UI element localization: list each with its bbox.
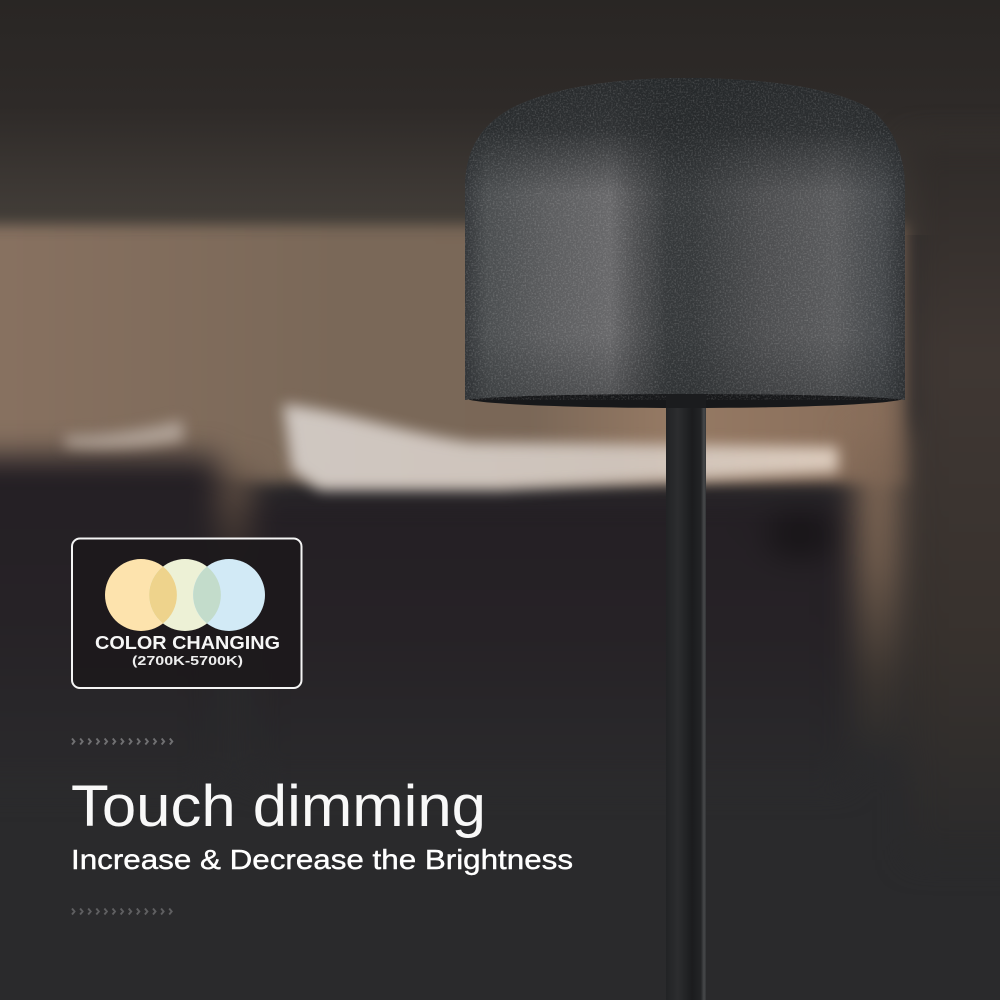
top chevron divider: [72, 738, 172, 744]
badge: color changing: [72, 538, 302, 688]
subheading: Increase & Decrease the Brightness: [71, 844, 573, 875]
lamp: [465, 78, 905, 1000]
lamp shade: [465, 78, 905, 408]
badge label: COLOR CHANGING: [95, 633, 280, 653]
dark furniture masses: [0, 140, 1000, 860]
pillows: [65, 404, 838, 490]
icon: overlapping colour circles: [105, 559, 265, 631]
heading: Touch dimming: [71, 774, 486, 839]
bottom chevron divider: [72, 908, 172, 914]
badge sublabel: (2700K-5700K): [132, 653, 243, 668]
lamp stem: [666, 392, 706, 1000]
